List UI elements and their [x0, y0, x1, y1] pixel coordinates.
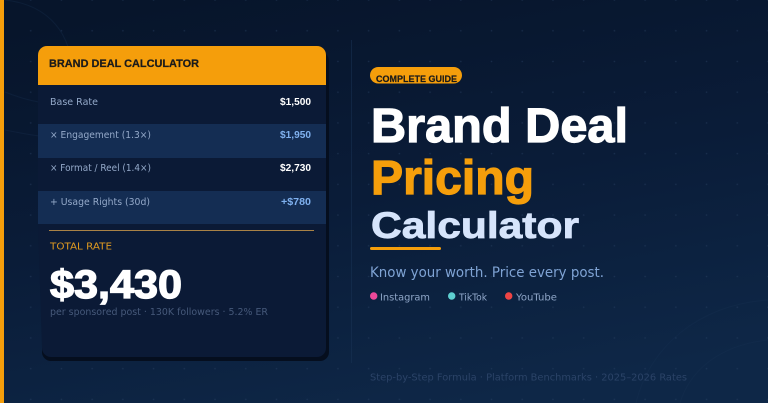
footer text: Step-by-Step Formula · Platform Benchmarks · 2025–2026 Rates: [370, 372, 687, 384]
row: usage rights: + Usage Rights (30d): [50, 197, 150, 208]
card header: [38, 46, 326, 85]
panel: calculator card: [38, 46, 329, 361]
row: engagement: × Engagement (1.3×): [50, 130, 151, 141]
row: format: [50, 162, 311, 174]
tagline: Know your worth. Price every post.: [370, 265, 604, 281]
row: base rate: [50, 96, 311, 108]
legend: tiktok: [448, 292, 487, 304]
title underline: [370, 247, 441, 250]
total rate value: $3,430: [50, 263, 182, 307]
title: [371, 100, 628, 246]
badge: complete guide: COMPLETE GUIDE: [376, 74, 457, 84]
row: usage rights: +$780: [281, 196, 311, 208]
row: format: × Format / Reel (1.4×): [50, 163, 151, 174]
row: engagement: [38, 124, 326, 158]
row: engagement: $1,950: [280, 129, 311, 141]
accent bar: [0, 0, 4, 403]
total rate details: per sponsored post · 130K followers · 5.2% ER: [50, 307, 268, 318]
total rate label: TOTAL RATE: [49, 242, 112, 252]
badge: complete guide: [370, 67, 462, 84]
row: base rate: $1,500: [280, 96, 311, 108]
legend: tiktok: TikTok: [458, 292, 487, 304]
row: format: $2,730: [280, 162, 311, 174]
legend: youtube: YouTube: [515, 292, 557, 304]
row: base rate: Base Rate: [50, 97, 98, 108]
row: usage rights: [38, 191, 326, 224]
card header: BRAND DEAL CALCULATOR: [49, 58, 199, 70]
title: Pricing: [371, 152, 534, 205]
title: Calculator: [371, 205, 579, 246]
legend: instagram: Instagram: [380, 292, 430, 304]
platform legend: [370, 292, 557, 304]
title: Brand Deal: [371, 100, 628, 153]
